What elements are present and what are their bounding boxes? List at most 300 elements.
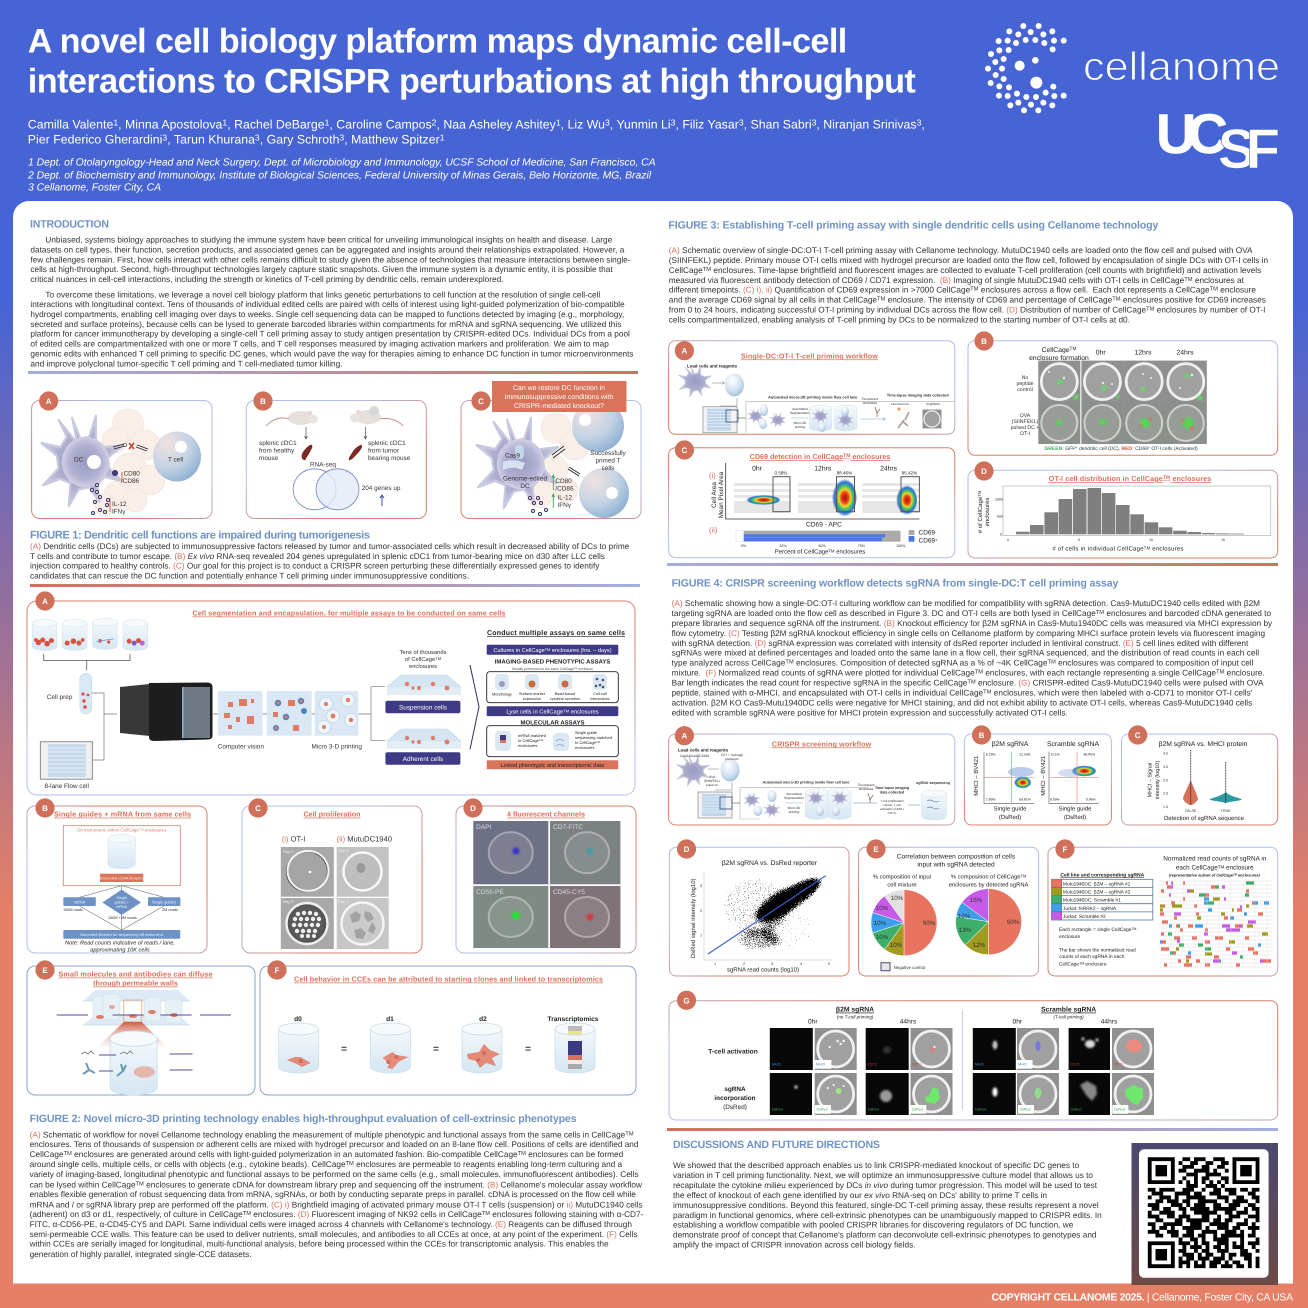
callout: immunosuppressive conditions with (505, 394, 613, 401)
panel: figure 1A (32, 391, 212, 518)
tumor cells (94, 409, 165, 516)
pie: detected composition: 12% (973, 942, 986, 949)
bar axis ticks: 25% (779, 544, 787, 548)
labels: CD80 (124, 470, 140, 478)
text block: figure 2 (29, 1130, 644, 1259)
step badge D: D (981, 467, 987, 476)
plot titles (992, 741, 1100, 748)
text block: figure 2: CellCageTM enclosures are generated around cells with light-guided polymerization in an automated fashion. Bio-compatible CellCageTM enclosures can be formed (30, 1150, 624, 1159)
quadrant values: 12.1% (1050, 752, 1060, 756)
tumor cells (527, 413, 590, 508)
text block: figure 4 (671, 599, 1273, 717)
transcriptomics enclosure (555, 1023, 595, 1073)
label: micro 3-D printing: Micro 3-D printing (311, 743, 362, 750)
button: adherent cells: Adherent cells (403, 756, 443, 763)
legend title: Cell line and corresponding sgRNA (1060, 872, 1145, 878)
box: imaging icons (487, 672, 618, 703)
panel: figure 4E (859, 839, 1039, 976)
enclosure d2 (462, 1023, 502, 1073)
pie heading left: cell mixture (887, 882, 917, 889)
note: bar: counts of each sgRNA in each (1059, 954, 1125, 960)
x ticks (1185, 809, 1231, 813)
time headers (752, 466, 898, 472)
image grid: no peptide (1038, 361, 1207, 403)
histogram (1003, 486, 1271, 536)
bracket (44, 654, 130, 670)
workflow schematic: Micro 3D (794, 421, 807, 425)
title: interactions to CRISPR perturbations at high throughput (28, 63, 916, 101)
note: bar: The bar shows the normalized read (1059, 947, 1136, 953)
row label: sgRNA incorporation (714, 1086, 756, 1111)
arrows across (57, 1014, 231, 1016)
box: imaging icons: interactions (590, 697, 610, 701)
label set: CD80 (555, 478, 572, 485)
axis labels: Single guide (1058, 806, 1092, 812)
panel: figure 1C (461, 381, 641, 518)
label set: IL-12 (558, 495, 573, 502)
percentages: 85.42% (902, 470, 917, 475)
y axis label: Cell Area (711, 482, 718, 508)
label: imaging assays: IMAGING-BASED PHENOTYPIC ASSAYS (495, 658, 610, 666)
histogram ticks: 10 (1149, 538, 1153, 542)
text block: figure 2: semi-permeable CCE walls. This feature can be used to deliver nutrients, small molecules, and antibodies to all CCEs at once, at any point of the experiment. (F) Cells (30, 1230, 638, 1239)
axis ticks: 5 (828, 962, 830, 966)
text block: figure 4: mixture. (F) Normalized read counts of sgRNA were plotted for individual CellCageTM enclosures, with each rectangle representing a single CellCageTM enclosure. (672, 669, 1265, 678)
histogram ticks: 5 (1078, 538, 1080, 542)
row label: OVA: pulsed DC + (1011, 425, 1039, 431)
diffuse arrows (99, 1054, 192, 1071)
text block: figure 4: (A) Schematic showing how a single-DC:OT-I culturing workflow can be modified for compatibility with sgRNA detection. Cas9-MutuDC1940 cells edited with β2M (672, 599, 1260, 608)
time point labels: d1 (386, 1016, 394, 1023)
authors: Pier Federico Gherardini3, Tarun Khurana3, Gary Schroth3, Matthew Spitzer1 (28, 132, 445, 146)
workflow schematic: Time-lapse imaging data collected (887, 394, 949, 398)
step badge A (39, 391, 58, 411)
scatter plot (704, 870, 833, 960)
panel title: OT-I cell distribution in CellCageTM enclosures (1049, 474, 1211, 483)
step badge A (35, 591, 55, 611)
note: rectangle: enclosure (1059, 934, 1080, 940)
image row: T-cell activation: MHCI (772, 1062, 781, 1066)
image: CD7-FITC: CD7-FITC (553, 824, 583, 831)
axis labels: sgRNA read counts (log10) (727, 966, 799, 974)
authors: Camilla Valente1, Minna Apostolova1, Rachel DeBarge1, Caroline Campos2, Naa Asheley Ashitey1, Liz Wu3, Yunmin Li3, Filiz Yasar3, Shan Sabri3, Niranjan Srinivas3, (28, 117, 925, 131)
time point labels: d0 (294, 1016, 302, 1023)
affiliations: 1 Dept. of Otolaryngology-Head and Neck Surgery, Dept. of Microbiology and Immunology, UCSF School of Medicine, San Francisco, CA (28, 157, 656, 168)
text block: figure 3 (669, 246, 1269, 324)
note: approximating 10K cells (90, 947, 150, 954)
step badge C: C (682, 446, 688, 455)
note: bar: CellCageTM enclosure (1059, 961, 1107, 967)
label i: (i) (709, 471, 716, 480)
text block: figure 2: (adherent) on d3 or d1, respectively, of culture in CellCageTM enclosures. (D) Fluorescent imaging of NK92 cells in CellCageTM enclosures following staining with α-CD7- (30, 1210, 644, 1219)
panel title: Small molecules and antibodies can diffuse (58, 970, 212, 978)
step badge A: A (46, 397, 52, 406)
label set: Cas9 (505, 452, 520, 459)
text block: introduction: of edited cells are compartmentalized with one or more T cells, and T cell responses measured by imaging activation markers and proliferation. We aim to map (30, 340, 609, 349)
text block: figure 1: (A) Dendritic cells (DCs) are subjected to immunosuppressive factors released by tumor and tumor-associated cells which result in decreased ability of DCs to prime (30, 542, 630, 551)
zoom beam (98, 1022, 167, 1047)
step badge B (35, 798, 55, 818)
button: suspension cells: Suspension cells (399, 704, 447, 711)
axis labels (973, 755, 1092, 821)
y label: intensity (log10) (1155, 761, 1161, 799)
panel: figure 4F (1048, 839, 1278, 976)
histogram ticks: 0 (1007, 538, 1009, 542)
chart title: each CellCageTM enclosure (1176, 864, 1254, 872)
text block: introduction: secreted and surface proteins), because cells can be lysed to generate barcoded libraries within compartments for mRNA and sgRNA sequencing. We utilized this (30, 320, 621, 329)
assay stack (487, 629, 625, 769)
step badge C (675, 440, 694, 460)
column labels: (i) OT-I (282, 835, 305, 844)
image: CD45-CY5 (550, 886, 620, 948)
icon: blocked receptor interaction (113, 443, 148, 451)
text block: introduction: To overcome these limitations, we leverage a novel cell biology platform that links genetic perturbations to cell function at the resolution of single cell-cell (45, 290, 600, 299)
text block: figure 2: can be lysed within CellCageTM enclosures to generate cDNA for downstream library prep and sequencing off the instrument. (B) Cellanome's molecular assay workflow (30, 1180, 642, 1189)
workflow schematic: T cell proliferation (880, 799, 904, 803)
bar axis ticks: 75% (858, 544, 866, 548)
text block: figure 2: enables flexible generation of robust sequencing data from mRNA, sgRNAs, or both by conducting separate preps in parallel. cDNA is processed on the flow cell while (30, 1190, 636, 1199)
panel title: through permeable walls (93, 978, 178, 988)
label set: primed T (595, 458, 621, 465)
chart title (1163, 856, 1267, 877)
text block: figure 4: activation. β2M KO Cas9-Mutu1940DC cells were negative for MHCI staining, and did not exhibit ability to activate OT-I cells, whereas Cas9-MutuDC1940 cells (672, 698, 1252, 707)
icon: enlarged enclosure (110, 1031, 157, 1095)
step badge B: B (979, 731, 985, 740)
authors (28, 117, 925, 146)
text block: discussions: We showed that the described approach enables us to link CRISPR-mediated knockout of specific DC genes to (673, 1161, 1080, 1170)
time point labels: Transcriptomics (548, 1016, 599, 1023)
histogram x label: # of cells in individual CellCageTM enclosures (1052, 545, 1184, 552)
image: segmented cells (267, 691, 312, 736)
image row: T-cell activation (770, 1028, 1154, 1070)
assay stack: Conduct multiple assays on same cells (487, 629, 625, 637)
logo: cellanome dots (985, 23, 1067, 113)
heading: figure 2: FIGURE 2: Novel micro-3D printing technology enables high-throughput evaluation of cell-extrinsic phenotypes (30, 1113, 577, 1125)
labels (74, 456, 183, 516)
image: MutuDC day 1: Day 1 (338, 899, 349, 904)
x label: Detection of sgRNA sequence (1164, 815, 1245, 822)
legend (881, 963, 925, 971)
x axis label: CD69 - APC (806, 521, 842, 528)
icon: instrument (120, 682, 212, 741)
step badge C: C (478, 397, 484, 406)
image row: T-cell activation: CD71 (868, 1062, 877, 1066)
row label: no peptide: No (1022, 375, 1028, 381)
label: healthy (259, 440, 297, 462)
workflow schematic: activation (CD69 / (880, 807, 904, 811)
note (65, 940, 175, 954)
box: imaging icons: Surface marker (519, 692, 546, 696)
panel: figure 3D (968, 461, 1278, 558)
workflow schematic: Time-lapse imaging (875, 786, 909, 790)
panel: figure 1B (246, 391, 426, 518)
image row: sgRNA incorporation: DsRed (912, 1108, 923, 1112)
text block: figure 4: targeting sgRNA are loaded onto the flow cell as described in Figure 3. DC and OT-I cells are both lysed in CellCageTM enclosures and barcoded cDNA generated to (672, 609, 1271, 618)
box: imaging icons: cytokine secretion (550, 697, 580, 701)
label: healthy: mouse (259, 455, 279, 462)
panel title: Cell proliferation (303, 810, 361, 819)
image: printed enclosures (315, 691, 358, 736)
text block: introduction: few challenges remain. First, how cells interact with other cells remains difficult to study given the absence of technologies that measure interactions between single- (30, 255, 631, 264)
title (28, 23, 916, 101)
y ticks: 1.5 (1163, 805, 1168, 809)
text block: figure 2: around single cells, multiple cells, or cells with objects (e.g., cytokine beads). CellCageTM enclosures are permeable to reagents enabling long-term culturing and a (30, 1160, 623, 1169)
step badge B: B (981, 337, 987, 346)
step badge A: A (42, 597, 48, 606)
pie: detected composition (956, 889, 1022, 955)
row label: OVA (1011, 413, 1039, 437)
header: scramble: (T-cell priming) (1053, 1014, 1084, 1019)
workflow schematic (679, 363, 955, 433)
box: molecular: Single guide (575, 730, 598, 735)
icon: primed T cells (572, 400, 629, 518)
panel: figure 4C (1122, 725, 1278, 825)
quadrant values (986, 752, 1096, 802)
axis labels: (DsRed) (1064, 814, 1086, 821)
text block: introduction: datasets on cell types, their function, secretion products, and associated genes can be aggregated and insights around their relationships extrapolated. However, a (30, 246, 625, 255)
label set: DC (520, 483, 530, 490)
label: tumor: splenic cDC1 (368, 440, 406, 447)
bar: culture: Cultures in CellCageTM enclosures (hrs. – days) (493, 647, 612, 654)
icon: plates (387, 675, 461, 749)
text block: figure 3: measured via fluorescent antibody detection of CD69 / CD71 expression. (B) Imaging of single MutuDC1940 cells with OT-I cells in CellCageTM enclosures at (669, 276, 1245, 285)
box: mRNA: mRNA (74, 899, 86, 904)
text block: discussions (673, 1161, 1102, 1250)
step badge C (471, 391, 491, 411)
box: molecular: sequencing matched (575, 735, 612, 740)
box: imaging icons: expression (523, 697, 541, 701)
step badge A: A (682, 732, 688, 741)
logo: UCSF: UC (1156, 102, 1228, 165)
step badge A (675, 341, 694, 360)
workflow schematic: Fluorescent (858, 783, 874, 787)
step badge B: B (260, 397, 266, 406)
heading: figure 4: FIGURE 4: CRISPR screening workflow detects sgRNA from single-DC:T cell priming assay (672, 578, 1118, 590)
pie: detected composition: 10% (958, 913, 971, 920)
row label: sgRNA incorporation: sgRNA (724, 1086, 746, 1093)
button: suspension cells (385, 701, 460, 713)
heading: figure 1: FIGURE 1: Dendritic cell functions are impaired during tumorigenesis (30, 530, 370, 542)
panel: figure 4D (669, 839, 849, 976)
image row: sgRNA incorporation: DsRed (868, 1108, 879, 1112)
workflow schematic: Segmentation (790, 411, 810, 415)
icon: cell prep tube (80, 673, 92, 714)
panel title (897, 853, 1016, 869)
axis labels: Single guide (993, 806, 1027, 812)
step badge F (267, 960, 287, 980)
workflow schematic: printing (795, 425, 805, 429)
workflow schematic: Brightfield (926, 402, 940, 406)
panel title: Cell segmentation and encapsulation, for multiple assays to be conducted on same cells (192, 608, 506, 618)
text block: discussions: immunosuppressive conditions. Beyond this featured, single-DC T-cell priming assay, these results represent a novel (673, 1201, 1099, 1210)
text block: figure 3: (A) Schematic overview of single-DC:OT-I T-cell priming assay with Cellanome technology. MutuDC1940 cells are loaded onto the flow cell and pulsed with OVA (669, 246, 1253, 255)
label: RNA-seq: RNA-seq (310, 462, 336, 468)
header (27, 23, 1280, 193)
image: computer vision (218, 691, 262, 736)
text block: discussions: recapitulate the cytokine milieu experienced by DCs in vivo during tumor progression. This model will be used to test (673, 1181, 1098, 1190)
text block: figure 2: enclosures. Tens of thousands of suspension or adherent cells are mixed with hydrogel precursor and loaded on an 8-lane flow cell. Positions of cells are identified and (30, 1140, 639, 1149)
label: cell prep: Cell prep (47, 694, 73, 701)
legend table (1052, 879, 1153, 920)
image: DAPI (473, 821, 548, 884)
text block: figure 2: mRNA and / or sgRNA library prep are performed off the platform. (C) i) Brightfield imaging of activated primary mouse OT-I T cells (suspension) or ii) MutuDC1940 cells (30, 1200, 643, 1209)
workflow schematic: CD71) (888, 811, 896, 815)
quadrant values: 6.23% (986, 752, 996, 756)
venn diagram (293, 469, 359, 510)
workflow schematic: antibodies (863, 401, 878, 405)
bar axis ticks: 100% (896, 544, 906, 548)
label set: /CD86 (555, 486, 574, 493)
workflow schematic: Automated micro-3D printing inside flow cell lane (768, 396, 857, 400)
bar grid chart (1159, 881, 1273, 967)
histogram ticks (995, 498, 1225, 542)
step badge C: C (1135, 731, 1141, 740)
text block: introduction: and improve polyclonal tumor-specific T cell priming and T cell-mediated tumor killing. (30, 360, 343, 369)
image: MutuDC day 1 (337, 898, 389, 949)
chart title: Normalized read counts of sgRNA in (1163, 856, 1267, 863)
percentages (774, 470, 917, 475)
image: CD45-CY5: CD45-CY5 (553, 889, 585, 896)
read labels: 100M reads (63, 908, 83, 912)
box: barcoded libraries: Barcoded libraries for sequencing off instrument (80, 932, 164, 937)
box: molecular: to CellCageTM (518, 738, 544, 743)
pie: input mixture: 10% (876, 934, 889, 941)
workflow schematic: counts, T cell (883, 803, 901, 807)
icon: tumor mouse (350, 406, 403, 426)
header: scramble: 44hrs (1101, 1019, 1118, 1026)
axis ticks: 1 (714, 962, 716, 966)
text block: discussions: variation in T cell priming functionality. Next, we will optimize an immunosuppressive culture model that allows us to (673, 1171, 1093, 1180)
icon: cell beakers (32, 618, 148, 650)
label ii: (ii) (709, 525, 718, 534)
quadrant values: 86.85% (1084, 752, 1095, 756)
pie: input mixture: 10% (891, 895, 904, 902)
legend table: Mutu1940DC: β2M – sgRNA #1 (1063, 881, 1131, 887)
equals: = (341, 1044, 347, 1055)
bar axis label: Percent of CellCageTM enclosures (775, 548, 865, 556)
text block: figure 3: different timepoints. (C) i), ii) Quantification of CD69 expression in >7000 CellCageTM enclosures across a flow cell. Each dot represents a CellCageTM enclosure (669, 286, 1256, 295)
column headers: 0hr (1096, 350, 1106, 356)
enclosure d1 (370, 1023, 410, 1073)
panel title: input with sgRNA detected (917, 862, 995, 869)
box: single guides (148, 897, 180, 906)
step badge B (974, 331, 994, 351)
panel: figure 4B (964, 725, 1111, 825)
text block: introduction: platform for cancer immunotherapy by developing a single-cell T cell priming assay to study antigen presentation by CRISPR-edited DCs. Individual DCs from a pool (30, 330, 630, 339)
bar: linked data: Linked phenotypic and transcriptomic data (501, 763, 605, 769)
on-instrument box: On instrument, within CellCageTM enclosures (77, 828, 167, 833)
workflow schematic: sgRNA sequencing (916, 781, 950, 785)
pie: detected composition: 13% (959, 927, 972, 934)
text block: figure 2: (A) Schematic of workflow for novel Cellanome technology enabling the measurement of multiple phenotypic and functional assays from the same cells in CellCageTM (30, 1130, 634, 1139)
row label: no peptide: control (1017, 387, 1033, 393)
box: single guides and mRNA: guides + (114, 900, 130, 904)
label: imaging assays: Serially performed on the same CellCage™ enclosure (512, 667, 593, 671)
heading: figure 3: FIGURE 3: Establishing T-cell priming assay with single dendritic cells using Cellanome technology (668, 220, 1158, 232)
logo: cellanome wordmark: cellanome (1083, 45, 1280, 89)
workflow schematic: pulse on (706, 783, 718, 787)
workflow schematic: data collected (880, 790, 905, 794)
box: molecular: enclosures (518, 743, 537, 748)
flow plot: b2m (984, 752, 1034, 803)
row label: OVA: OVA (1020, 413, 1031, 419)
image row: sgRNA incorporation: DsRed (975, 1108, 986, 1112)
logo: UCSF (1156, 102, 1280, 180)
text block: discussions: demonstrate proof of concept that Cellanome's platform can deconvolute cell-extrinsic phenotypes to genotypes and (673, 1231, 1097, 1240)
image row: T-cell activation: CD71 (912, 1062, 921, 1066)
icon: genome-edited DC (476, 418, 558, 508)
labels: DC (74, 456, 84, 464)
axis ticks: 2 (743, 962, 745, 966)
workflow schematic: Cas9-MutuDC1940 (680, 754, 709, 758)
header: scramble: Scramble sgRNA (1041, 1007, 1096, 1014)
text block: introduction: cells at high-throughput. Second, high-throughput technologies largely capture static snapshots. Given the immune system is a dynamic entity, it is possible that (30, 265, 613, 274)
panel: figure 2E (27, 960, 255, 1095)
axis ticks: 2 (700, 909, 702, 913)
column labels: (ii) MutuDC1940 (337, 835, 392, 844)
bar legend: CD69+ (919, 537, 938, 544)
step badge E (35, 960, 55, 980)
row label: sgRNA incorporation: (DsRed) (723, 1104, 747, 1111)
affiliations (27, 157, 656, 193)
stacked bars (736, 531, 908, 542)
icon: antibodies (83, 1063, 126, 1076)
text block: figure 2: generation of highly parallel, integrated single-CCE datasets. (30, 1250, 252, 1259)
axis ticks: 3 (771, 962, 773, 966)
text block: figure 2: within CCEs are serially imaged for longitudinal, multi-functional analysis, before being processed within the CCEs for transcriptomic analysis. This enables the (29, 1240, 609, 1249)
workflow schematic: printing (789, 810, 799, 814)
header: scramble (1013, 1007, 1118, 1026)
legend: GREEN: GFP+ dendritic cell (DC), RED: CD69+ OT-I cells (Activated) (1044, 446, 1198, 452)
text block: introduction: genomic edits with enhanced T cell priming to specific DC genes, which would pave the way for therapies aiming to enhance DC function in tumor microenvironments (30, 350, 634, 359)
label: healthy: splenic cDC1 (259, 440, 297, 447)
box: imaging icons: Cell-cell (593, 692, 607, 696)
box: single guides: Single guides (152, 899, 176, 904)
legend: Negative control (894, 965, 925, 970)
flow plots (726, 463, 919, 519)
panel title (58, 970, 212, 988)
step badge F: F (1063, 845, 1068, 854)
box: imaging icons: Bead-based (555, 692, 575, 696)
y axis label: Mean Pixel Area (718, 471, 725, 518)
text block: introduction: critical nuances in cell-cell interactions, including the strength or kinetics of T-cell priming by dendritic cells, remain underexplored. (30, 275, 503, 284)
y ticks (1163, 752, 1168, 809)
box: mRNA (63, 897, 96, 906)
plot title: β2M sgRNA vs. MHCI protein (1159, 741, 1248, 748)
step badge A (675, 726, 694, 745)
image row: T-cell activation: MHCI (975, 1062, 984, 1066)
image row: sgRNA incorporation: DsRed (1070, 1108, 1082, 1112)
pie: detected composition: 50% (1007, 919, 1020, 926)
row label: no peptide (1016, 375, 1034, 393)
plot titles: β2M sgRNA (992, 741, 1029, 748)
y label (1148, 761, 1161, 799)
image: CD56-PE: CD56-PE (476, 889, 504, 896)
text block: figure 1: T cells and contribute to tumor escape. (B) Ex vivo RNA-seq revealed 204 genes upregulated in splenic cDC1 from tumor-bearing mice on d30 after LLC cells (30, 552, 605, 561)
footer band (0, 1284, 1308, 1308)
label: tumor: bearing mouse (368, 455, 411, 462)
text block: figure 4: peptide, stained with α-MHCI, and encapsulated with OT-I cells in individual CellCageTM enclosures, which were then labeled with α-CD71 to monitor OT-I cells' (672, 688, 1253, 697)
pie heading left (873, 873, 932, 889)
histogram ticks: 0 (1000, 532, 1002, 536)
labels: T cell (168, 456, 183, 464)
step badge G (677, 991, 696, 1010)
pie heading right: enclosures by detected sgRNA (949, 882, 1029, 889)
image row: sgRNA incorporation (770, 1073, 1154, 1115)
labels: IFNγ (112, 508, 126, 516)
panel title: Correlation between composition of cells (897, 853, 1016, 860)
note: rectangle: Each rectangle = single CellCageTM (1059, 927, 1137, 933)
